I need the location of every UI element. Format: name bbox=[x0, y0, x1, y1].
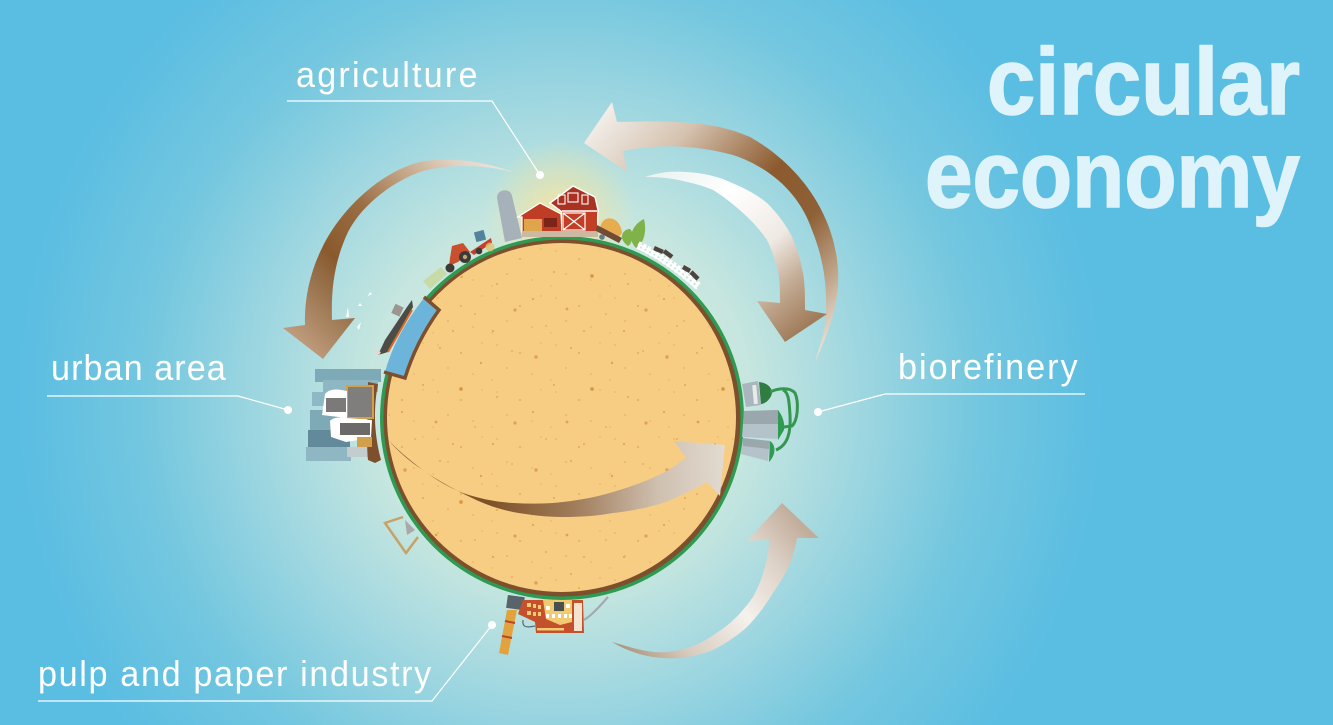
planet small speckles bbox=[388, 244, 734, 590]
icon: trees bbox=[622, 229, 632, 246]
arrow: agriculture to biorefinery inner bbox=[645, 172, 827, 342]
arrow: urban area through planet to biorefinery bbox=[388, 440, 725, 517]
icon: barn small wing bbox=[518, 203, 562, 232]
icon: silo bbox=[497, 190, 522, 242]
tank bottom bbox=[741, 438, 770, 461]
arrow: pulp and paper to biorefinery bbox=[612, 503, 819, 658]
agriculture farm bbox=[423, 186, 699, 289]
label: urban area: urban area bbox=[51, 348, 226, 388]
chimney bbox=[499, 610, 517, 655]
city office block bbox=[347, 386, 373, 418]
icon: tractor bbox=[446, 230, 494, 272]
factory yellow block bbox=[543, 600, 572, 625]
urban area city bbox=[306, 369, 381, 463]
tank middle bbox=[742, 410, 779, 439]
title: economy bbox=[925, 122, 1300, 228]
city orange annex bbox=[357, 437, 372, 447]
label: agriculture: agriculture bbox=[296, 55, 477, 95]
barn doors and windows bbox=[524, 193, 597, 232]
label: biorefinery bbox=[814, 347, 1085, 416]
title: circular bbox=[987, 29, 1300, 135]
city brown trees bbox=[367, 382, 381, 463]
icon: barn main bbox=[550, 186, 598, 232]
city skyline bbox=[306, 369, 381, 461]
label: urban area bbox=[47, 348, 292, 414]
label: biorefinery: biorefinery bbox=[898, 347, 1078, 387]
pipes bbox=[584, 597, 608, 620]
label: pulp and paper industry: pulp and paper industry bbox=[38, 654, 432, 694]
tank top bbox=[742, 381, 761, 407]
biorefinery bbox=[741, 381, 797, 462]
arrow: agriculture to biorefinery outer return bbox=[584, 102, 838, 362]
barn stone base bbox=[522, 231, 598, 237]
icon: hay cart bbox=[596, 225, 622, 243]
icon: fence and cows bbox=[638, 244, 699, 289]
label: pulp and paper industry bbox=[38, 621, 496, 701]
planet green rim bbox=[380, 236, 744, 600]
city white building top bbox=[322, 389, 347, 418]
icon: derrick bbox=[385, 517, 418, 553]
factory red block bbox=[518, 600, 584, 633]
factory windows bbox=[546, 603, 582, 631]
planet large speckles bbox=[388, 244, 734, 590]
sun glow behind farm bbox=[485, 140, 635, 290]
icon: ship bbox=[346, 292, 413, 355]
icon: crop field bbox=[423, 267, 447, 289]
green pipes bbox=[770, 389, 797, 450]
label: agriculture bbox=[287, 55, 544, 179]
planet sand core bbox=[387, 243, 736, 592]
pulp and paper factory bbox=[499, 595, 608, 655]
arrow: agriculture to urban area bbox=[283, 160, 513, 359]
water inlet bbox=[384, 297, 439, 378]
city white building bottom bbox=[330, 417, 372, 442]
title bbox=[925, 29, 1300, 228]
icon: hay bale bbox=[600, 218, 622, 238]
planet bbox=[380, 236, 744, 600]
planet brown crust bbox=[384, 240, 740, 596]
solar panel bbox=[506, 595, 525, 610]
